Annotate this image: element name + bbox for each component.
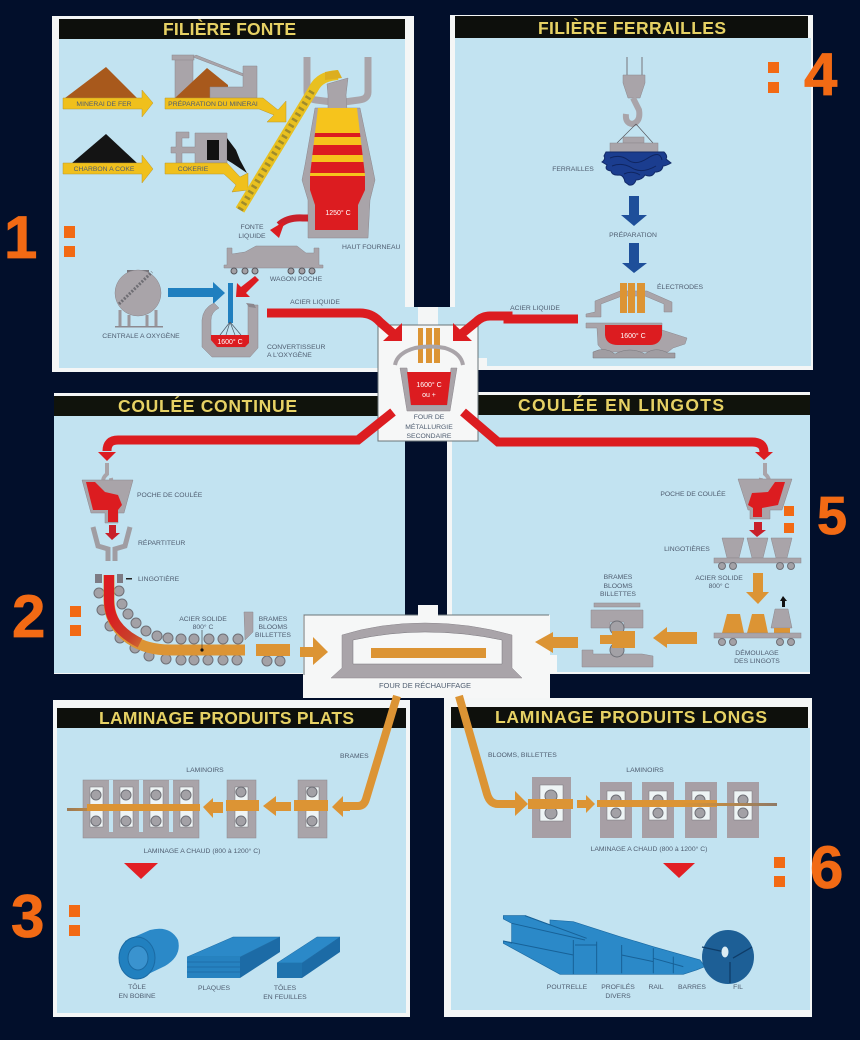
arrow: blooms to long rolling xyxy=(459,696,528,816)
coal pile with arrow xyxy=(63,134,153,183)
furnace label: FOUR DE RÉCHAUFFAGE xyxy=(379,681,471,690)
preparation label: PRÉPARATION xyxy=(609,230,657,239)
product labels: POUTRELLE xyxy=(547,984,588,991)
billets label: BILLETTES xyxy=(255,632,291,639)
ladle wagon xyxy=(224,246,323,283)
product: coil: EN BOBINE xyxy=(118,993,156,1000)
arrow: ingots to furnace xyxy=(535,632,578,653)
furnace shape xyxy=(331,623,522,678)
orange colon 3 xyxy=(69,905,80,936)
steel strip passing through stands xyxy=(67,796,350,818)
arrow: liquid iron: LIQUIDE xyxy=(238,233,266,240)
arrow: liquid steel from converter: ACIER LIQUIDE xyxy=(290,299,340,306)
solid steel label: ACIER SOLIDE xyxy=(179,616,227,623)
arrow: liquid iron: FONTE xyxy=(240,224,264,231)
arrow: liquid iron xyxy=(238,218,308,240)
panel: filière ferrailles xyxy=(450,15,813,370)
rolling labels: BLOOMS, BILLETTES xyxy=(488,752,557,759)
ore preparation plant xyxy=(165,55,286,122)
blast furnace: HAUT FOURNEAU xyxy=(342,244,400,251)
orange colon 5 xyxy=(784,506,794,533)
electric arc furnace: ÉLECTRODES xyxy=(657,282,704,291)
mould: LINGOTIÈRE xyxy=(138,574,180,583)
tundish xyxy=(93,527,185,561)
furnace label: FOUR DE xyxy=(414,414,445,421)
demoulding ingots: DÉMOULAGE xyxy=(735,648,779,657)
furnace label xyxy=(405,414,453,440)
number 6: 6 xyxy=(810,834,843,901)
conveyor xyxy=(240,70,342,210)
panel: four de métallurgie secondaire xyxy=(378,307,487,441)
steel slab xyxy=(371,648,486,658)
heading: filière ferrailles: FILIÈRE FERRAILLES xyxy=(538,17,726,38)
converter: A L'OXYGÈNE xyxy=(267,350,312,359)
red triangle xyxy=(124,863,158,879)
molten steel xyxy=(407,372,451,405)
product: plates xyxy=(187,937,280,992)
heading: laminage produits longs: LAMINAGE PRODUITS LONGS xyxy=(495,707,767,727)
demoulding ingots xyxy=(714,596,801,665)
heading: coulée continue xyxy=(54,395,382,416)
product: sheets xyxy=(263,937,340,1001)
orange colon 6 xyxy=(774,857,785,887)
casting ladle: POCHE DE COULÉE xyxy=(137,490,203,499)
casting ladle xyxy=(660,463,792,519)
ladle wagon: WAGON POCHE xyxy=(270,276,323,283)
panel: laminage produits longs xyxy=(444,698,812,1017)
red triangle xyxy=(663,863,695,878)
ingot moulds on wagon xyxy=(664,538,801,570)
converter xyxy=(202,283,326,359)
product labels: PROFILÉS xyxy=(601,982,635,991)
furnace label: SECONDAIRE xyxy=(407,433,452,440)
iron ore pile with arrow xyxy=(63,67,153,117)
cut billet xyxy=(256,644,290,656)
crane hook xyxy=(623,57,645,124)
product labels xyxy=(547,982,743,1000)
tundish: RÉPARTITEUR xyxy=(138,538,185,547)
rolling stands group xyxy=(83,780,327,838)
blast furnace xyxy=(302,57,400,251)
arrow: ladle to moulds xyxy=(749,522,766,537)
slabbing mill: BRAMES xyxy=(604,574,633,581)
furnace label: MÉTALLURGIE xyxy=(405,422,453,431)
number 2: 2 xyxy=(12,583,45,650)
heading: filière ferrailles xyxy=(455,16,808,38)
product: coil xyxy=(118,929,179,1000)
panel: coulée continue xyxy=(54,393,405,674)
coke plant xyxy=(165,132,248,192)
product: sheets: TÔLES xyxy=(274,983,297,992)
steel strip passing through stands xyxy=(528,795,777,813)
arrow: continuous casting to furnace xyxy=(300,637,328,665)
product: sheets: EN FEUILLES xyxy=(263,994,307,1001)
rolling stands xyxy=(532,777,759,838)
electrodes xyxy=(418,328,440,363)
blast furnace: 1250° C xyxy=(325,209,351,217)
shear xyxy=(244,612,253,640)
heading: laminage produits plats: LAMINAGE PRODUITS PLATS xyxy=(99,708,354,728)
billets label xyxy=(255,616,291,639)
arrow: ingots to mill xyxy=(653,627,697,648)
temperature: 1600° C xyxy=(416,381,442,389)
slabbing mill: BILLETTES xyxy=(600,591,636,598)
product labels: RAIL xyxy=(648,984,664,991)
casting ladle xyxy=(82,463,203,523)
panel: laminage produits plats xyxy=(53,700,410,1017)
coal pile with arrow: CHARBON A COKE xyxy=(74,166,135,173)
number 5: 5 xyxy=(817,486,847,546)
panel: filière fonte xyxy=(52,16,414,372)
mould xyxy=(95,574,180,583)
temperature xyxy=(416,381,442,399)
arrow: ladle to tundish xyxy=(105,525,120,540)
heading: coulée en lingots: COULÉE EN LINGOTS xyxy=(518,394,724,415)
heading: filière fonte: FILIÈRE FONTE xyxy=(163,18,296,39)
ladle xyxy=(400,368,457,411)
temperature: ou + xyxy=(422,392,436,399)
arrow: liquid steel from converter xyxy=(267,299,402,341)
arrow: solid steel down xyxy=(746,573,769,604)
rolling labels xyxy=(144,753,369,855)
number 3: 3 xyxy=(11,883,44,950)
scrap metal pile xyxy=(602,152,671,185)
orange colon 4 xyxy=(768,62,779,93)
continuous casting rollers xyxy=(94,586,285,666)
rolling labels xyxy=(488,752,707,853)
arrow: steel to ingot casting xyxy=(463,412,773,460)
product labels: FIL xyxy=(733,984,743,991)
arrow: oxygen xyxy=(168,282,225,304)
electric arc furnace: 1600° C xyxy=(620,332,646,340)
number 4: 4 xyxy=(804,41,838,108)
converter: CONVERTISSEUR xyxy=(267,344,326,351)
solid steel label: ACIER SOLIDE xyxy=(695,575,743,582)
solid steel label xyxy=(695,575,743,590)
oxygen plant: CENTRALE A OXYGÈNE xyxy=(102,331,180,340)
coke plant: COKERIE xyxy=(178,166,209,173)
arrow: slabs to flat rolling xyxy=(350,696,397,806)
panel: four de réchauffage xyxy=(300,605,578,698)
rolling labels: LAMINOIRS xyxy=(626,767,664,774)
heading: coulée en lingots xyxy=(477,394,810,415)
arrow: liquid steel from electric furnace: ACIER LIQUIDE xyxy=(510,305,560,312)
ladle lid xyxy=(395,346,463,365)
number 1: 1 xyxy=(4,204,37,271)
solid steel label: 800° C xyxy=(193,623,214,631)
panel: coulée en lingots xyxy=(447,392,810,674)
solid steel label xyxy=(179,616,227,652)
rolling labels: LAMINAGE A CHAUD (800 à 1200° C) xyxy=(591,845,707,853)
products: beams, profiles, rail, bars xyxy=(503,916,705,974)
product: coil: TÔLE xyxy=(128,982,146,991)
rolling labels: LAMINOIRS xyxy=(186,767,224,774)
electric arc furnace xyxy=(586,282,704,358)
heading: coulée continue: COULÉE CONTINUE xyxy=(118,395,297,416)
orange colon 2 xyxy=(70,606,81,636)
heading: filière fonte xyxy=(59,18,405,39)
casting ladle: POCHE DE COULÉE xyxy=(660,489,726,498)
billets label: BRAMES xyxy=(259,616,288,623)
solid steel label: 800° C xyxy=(709,582,730,590)
arrow: steel to continuous casting xyxy=(98,412,393,461)
demoulding ingots: DES LINGOTS xyxy=(734,658,780,665)
arrow: scrap to preparation xyxy=(621,196,647,226)
product labels: DIVERS xyxy=(605,993,631,1000)
steel strand xyxy=(109,575,245,650)
converter: 1600° C xyxy=(217,338,243,346)
product: wire coil xyxy=(702,930,754,984)
ingot moulds on wagon: LINGOTIÈRES xyxy=(664,544,710,553)
rolling labels: BRAMES xyxy=(340,753,369,760)
billets label: BLOOMS xyxy=(258,624,288,631)
slabbing mill xyxy=(582,574,653,667)
slabbing mill: BLOOMS xyxy=(603,583,633,590)
orange colon 1 xyxy=(64,226,75,257)
ore preparation plant: PRÉPARATION DU MINERAI xyxy=(168,99,258,108)
rolling labels: LAMINAGE A CHAUD (800 à 1200° C) xyxy=(144,847,260,855)
product labels: BARRES xyxy=(678,984,706,991)
electromagnet xyxy=(610,124,658,152)
arrow: iron into converter xyxy=(236,276,259,297)
oxygen plant xyxy=(102,270,180,340)
arrow: liquid steel from electric furnace xyxy=(453,305,578,341)
scrap label: FERRAILLES xyxy=(552,166,594,173)
arrow: preparation to furnace xyxy=(622,243,647,273)
iron ore pile with arrow: MINERAI DE FER xyxy=(76,101,132,108)
product: plates: PLAQUES xyxy=(198,985,231,992)
furnace chamber xyxy=(353,632,502,664)
